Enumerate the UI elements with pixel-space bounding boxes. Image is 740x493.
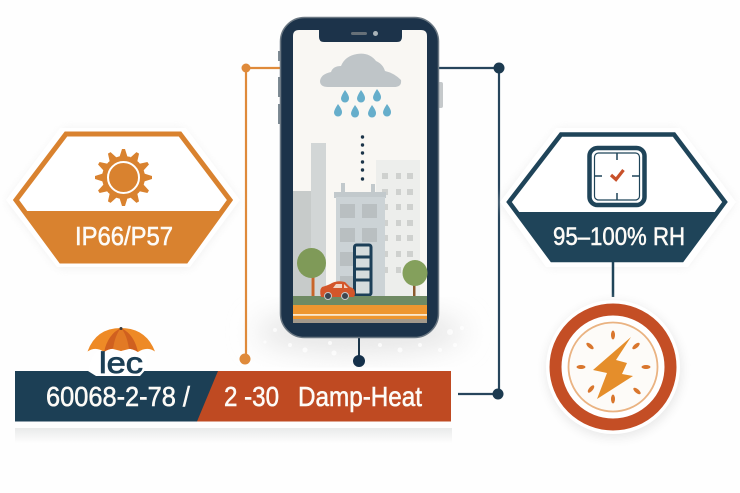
- ladder: [354, 245, 371, 295]
- cycle text: 2 -30: [224, 381, 279, 412]
- humidity label: 95–100% RH: [553, 223, 685, 251]
- car: [320, 281, 355, 300]
- panel: standard bar: [15, 371, 452, 444]
- panel: humidity hexagon: [500, 128, 736, 267]
- panel: IP rating hexagon: [6, 128, 240, 267]
- connector: orange line from phone to bar: [240, 64, 281, 364]
- phone side buttons: [278, 51, 443, 124]
- connector: phone to bar: [353, 336, 365, 367]
- left tree: [297, 248, 326, 297]
- city buildings: [293, 143, 420, 296]
- damp-heat text: Damp-Heat: [298, 381, 422, 412]
- rain cloud: [320, 54, 401, 87]
- icon: IEC umbrella logo: [88, 327, 155, 380]
- IP rating label: IP66/P57: [75, 221, 173, 251]
- connector: navy line from phone to bar: [438, 62, 504, 400]
- phone camera: [351, 31, 378, 36]
- connector: humidity hexagon to circle: [612, 261, 614, 297]
- right tree: [402, 260, 428, 297]
- phone ground shadow: [255, 310, 465, 356]
- dotted line: [361, 135, 364, 181]
- icon: sun gear: [95, 149, 152, 206]
- bar navy segment: [15, 371, 218, 422]
- icon: IEC umbrella logo: lec: [99, 347, 143, 380]
- radial tick marks: [576, 330, 650, 404]
- panel: power surge circle: [546, 300, 682, 438]
- ground and road: [293, 296, 427, 323]
- phone: [278, 18, 443, 338]
- phone screen: [293, 30, 427, 323]
- icon: lightning bolt: [593, 337, 633, 399]
- rain drops: [334, 89, 391, 118]
- icon: square clock: [590, 148, 644, 205]
- standard number text: 60068-2-78 /: [46, 381, 190, 412]
- phone body: [280, 18, 438, 338]
- bar red segment: [190, 371, 451, 422]
- bar under-shadow: [15, 428, 452, 444]
